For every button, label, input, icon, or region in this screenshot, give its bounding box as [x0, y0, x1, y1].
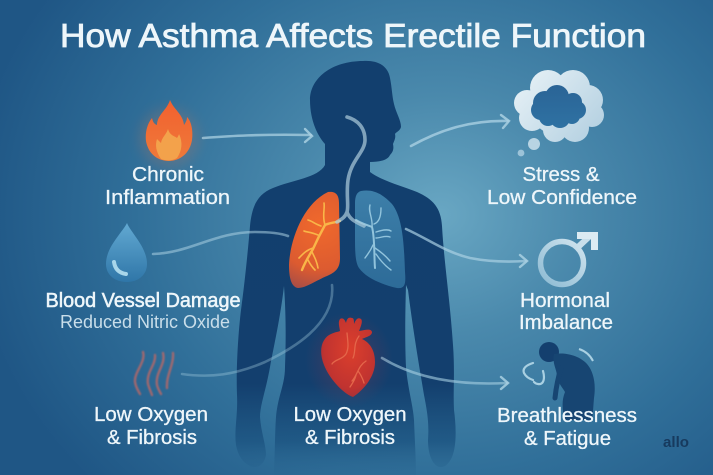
arrow: vessel damage to lungs: [153, 232, 288, 254]
arrow: heart to breathlessness: [382, 358, 508, 389]
left lung inflamed: [289, 192, 340, 288]
label: low oxygen center: & Fibrosis: [305, 426, 395, 449]
label: blood vessel damage: [46, 289, 240, 332]
title: How Asthma Affects Erectile Function: [60, 17, 646, 54]
label: breathlessness: Breathlessness: [497, 404, 637, 427]
label: stress: Low Confidence: [487, 186, 637, 209]
label: chronic inflammation: Chronic: [132, 163, 204, 186]
logo: allo: [663, 434, 689, 451]
trachea: [337, 117, 365, 226]
label: stress: Stress &: [522, 163, 600, 186]
label: blood vessel damage: Blood Vessel Damage: [46, 289, 240, 312]
label: blood vessel damage: Reduced Nitric Oxide: [60, 312, 230, 332]
icon: water drop: [106, 223, 147, 282]
label: hormonal: Hormonal: [520, 289, 610, 312]
label: low oxygen center: Low Oxygen: [294, 403, 406, 426]
label: low oxygen center: [294, 403, 406, 449]
arrow: body to stress: [411, 115, 509, 146]
icon: breathless figure: [524, 342, 595, 420]
label: low oxygen left: & Fibrosis: [107, 426, 197, 449]
label: chronic inflammation: [105, 163, 230, 209]
icon: wavy oxygen lines: [135, 352, 173, 395]
label: breathlessness: & Fatigue: [524, 427, 611, 450]
label: breathlessness: [497, 404, 637, 450]
right bronchi: [356, 205, 391, 270]
label: hormonal: [519, 289, 613, 334]
right lung: [355, 191, 405, 288]
icon: male symbol: [540, 232, 598, 284]
label: hormonal: Imbalance: [519, 311, 613, 334]
label: low oxygen left: Low Oxygen: [94, 403, 208, 426]
arrow: lungs to hormonal: [406, 229, 527, 267]
label: chronic inflammation: Inflammation: [105, 186, 230, 209]
arrow: low oxygen to lungs: [182, 285, 332, 376]
icon: flame: [139, 100, 199, 168]
lungs: [289, 191, 405, 288]
human silhouette: [235, 61, 456, 475]
arrow: inflammation to body: [203, 129, 312, 142]
left bronchi: [299, 203, 340, 270]
icon: thought cloud: [514, 70, 604, 156]
label: low oxygen left: [94, 403, 208, 449]
icon: heart: [305, 312, 393, 408]
label: stress: [487, 163, 637, 209]
